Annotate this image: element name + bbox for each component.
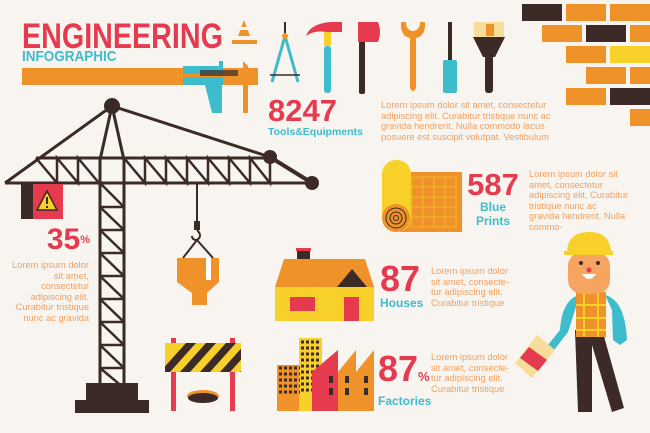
icon: wrench — [401, 22, 425, 91]
icon: screwdriver — [443, 22, 457, 93]
text: blueprints: Lorem ipsum dolor sit amet, consectetur adipiscing elit. Curabitur tristique nunc ac gravida hendrerit. Nulla commo- — [529, 169, 628, 232]
stat: 587 blue prints: 587 — [467, 167, 519, 202]
stat: 8247 tools: Tools&Equipments — [268, 126, 363, 138]
stat: 87% factories: 87% — [378, 348, 430, 389]
stat: 587 blue prints — [467, 167, 519, 228]
stat: 87% factories — [378, 348, 431, 408]
icon: compass — [270, 22, 300, 82]
crane — [5, 106, 312, 388]
barrier — [165, 338, 241, 411]
stat: 35%: 35% — [47, 223, 90, 256]
text: 35%: Lorem ipsum dolor sit amet, consectetur adipiscing elit. Curabitur tristique nunc ac gravida — [12, 260, 89, 322]
hook bucket — [177, 221, 219, 305]
caliper ruler — [22, 61, 258, 113]
stat: 8247 tools — [268, 93, 363, 138]
icon: warning sign — [33, 184, 63, 219]
text: houses: Lorem ipsum dolor sit amet, consecte-tur adipiscing elit. Curabitur tristique — [431, 266, 509, 308]
icon: blueprint roll — [382, 160, 462, 232]
stat: 8247 tools: 8247 — [268, 93, 337, 128]
text: tools: Lorem ipsum dolor sit amet, consectetur adipiscing elit. Curabitur tristique nunc ac gravida hendrerit. Nulla commodo lacus posuere est suscipit volutpat. Vestibulum — [381, 100, 550, 142]
icon: cone — [232, 20, 257, 44]
stat: 587 blue prints: Prints — [476, 214, 510, 228]
stat: 587 blue prints: Blue — [480, 200, 506, 214]
title: ENGINEERING — [22, 17, 223, 56]
stat: 87 houses: 87 — [380, 258, 420, 299]
bricks — [522, 4, 650, 126]
stat: 87% factories: Factories — [378, 394, 431, 408]
subtitle: INFOGRAPHIC — [22, 48, 116, 65]
icon: axe — [358, 22, 380, 94]
icon: hammer — [306, 22, 342, 93]
icon: factories — [277, 338, 374, 411]
icon: paintbrush — [473, 22, 505, 93]
stat: 87 houses: Houses — [380, 296, 423, 310]
icon: house — [275, 248, 374, 321]
worker — [515, 232, 627, 412]
text: factories: Lorem ipsum dolor sit amet, consecte-tur adipiscing elit. Curabitur tristique — [431, 352, 509, 394]
